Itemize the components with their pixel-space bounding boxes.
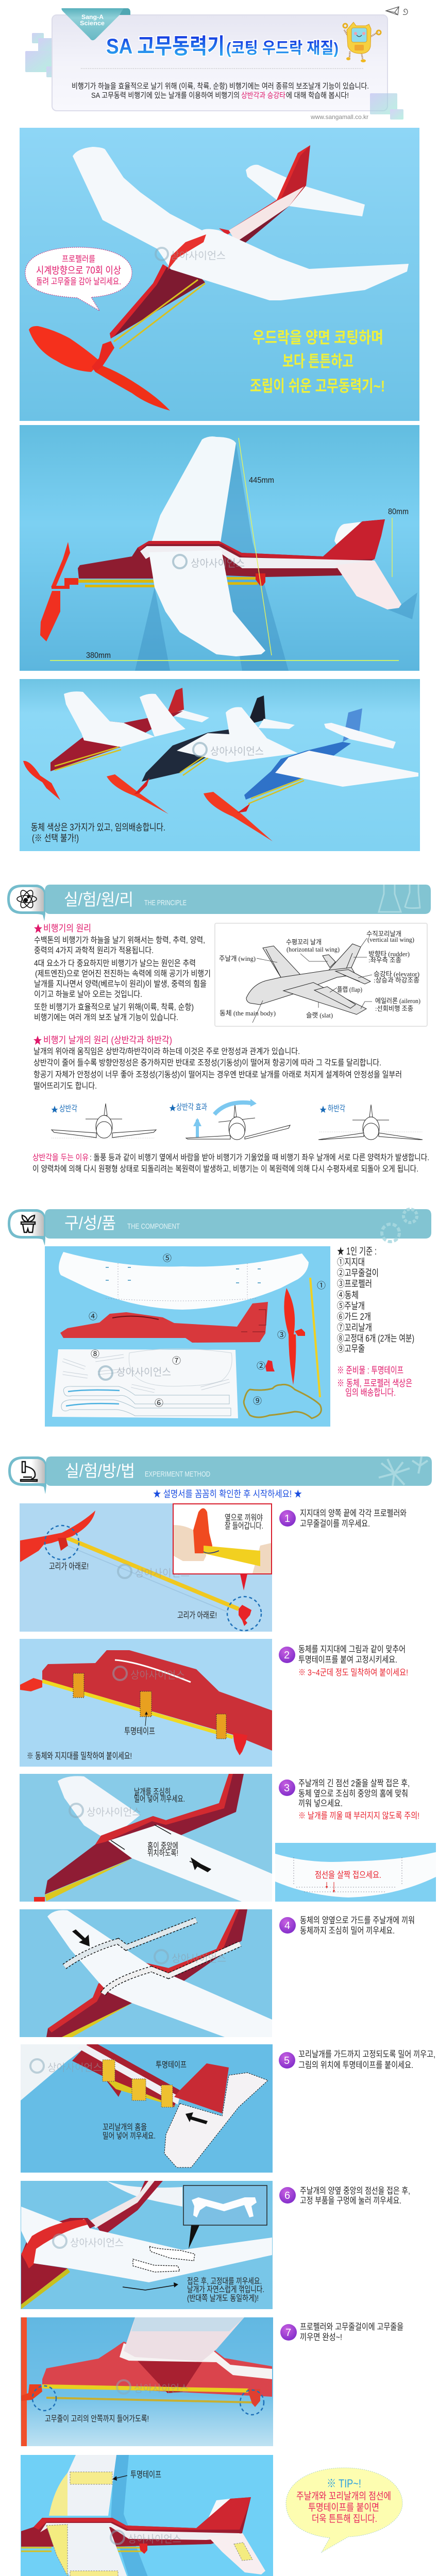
intro text: 에 대해 학습해 봅시다! <box>286 91 349 100</box>
part labels: 에일러론 (aileron) <box>375 997 420 1005</box>
watermark <box>117 2380 189 2395</box>
step badge <box>279 1917 296 1934</box>
shadows <box>135 443 417 671</box>
diagram: anhedral angle <box>318 1104 423 1140</box>
brand ribbon: Science <box>80 20 105 27</box>
heading: 비행기의 원리 <box>43 923 91 934</box>
step 5 text <box>279 2049 435 2070</box>
step 2 text <box>279 1645 408 1677</box>
horizontal tail <box>208 2533 265 2574</box>
step 1 text <box>279 1509 407 1529</box>
step badge: 5 <box>284 2055 290 2066</box>
step 2 text: 투명테이프를 붙여 고정시키세요. <box>298 1655 397 1665</box>
step badge: 3 <box>284 1783 290 1794</box>
text block: why dihedral <box>32 1153 429 1174</box>
speech bubble: 시계방향으로 70회 이상 <box>36 265 121 276</box>
watermark <box>111 2531 181 2545</box>
part number labels: ⑥ <box>155 1398 163 1408</box>
long wing <box>47 1910 272 2037</box>
label: 하반각 <box>328 1104 345 1113</box>
section header: the component <box>8 1209 431 1246</box>
body text: 날개를 지나면서 양력(베르누이 원리)이 발생, 중력의 힘을 <box>34 979 207 989</box>
tip bubble <box>286 2468 402 2552</box>
step badge <box>279 2187 296 2204</box>
wing <box>124 2317 244 2361</box>
speech bubble: 프로펠러를 <box>62 255 95 264</box>
part labels: :선회비행 조종 <box>375 1005 413 1012</box>
part number labels: ② <box>257 1361 265 1371</box>
fuselage <box>72 2044 180 2107</box>
step 4 text: 동체의 양옆으로 가드를 주날개에 끼워 <box>300 1916 415 1925</box>
step 7 text: 끼우면 완성~! <box>300 2332 342 2342</box>
photo: plane dimensions <box>20 425 419 671</box>
wing corner <box>21 2044 90 2100</box>
inset: fixing part <box>183 2185 267 2225</box>
step 2 text: 동체를 지지대에 그림과 같이 맞추어 <box>298 1645 406 1654</box>
captions: 위치하도록! <box>147 1849 178 1858</box>
captions: 날개가 자연스럽게 꺾입니다. <box>187 2285 264 2294</box>
captions: 밀어 넣어 끼우세요. <box>134 1794 185 1804</box>
intro text: 상반각과 승강타 <box>241 91 285 100</box>
body text: 또한 비행기가 효율적으로 날기 위해(이륙, 착륙, 순항) <box>34 1003 194 1012</box>
caption: tape: 투명테이프 <box>124 1726 155 1736</box>
icon: plant pot <box>21 1215 35 1232</box>
body text: 날개의 위아래 움직임은 상반각/하반각이라 하는데 이것은 주로 안정성과 관계가 있습니다. <box>33 1047 300 1056</box>
intro text: 비행기가 하늘을 효율적으로 날기 위해 (이륙, 착륙, 순항) 비행기에는 여러 종류의 보조날개 기능이 있습니다. <box>72 82 369 91</box>
watermark: 상아사이언스 <box>70 2237 124 2249</box>
colour note <box>31 822 165 843</box>
hooks <box>233 1733 247 1755</box>
hook <box>247 2389 260 2407</box>
wing <box>21 2207 272 2282</box>
parts list <box>337 1246 414 1398</box>
tip bubble: 주날개와 꼬리날개의 점선에 <box>296 2490 391 2502</box>
fuselage strip <box>95 2181 163 2236</box>
step 6 text: 고정 부품을 구멍에 눌러 끼우세요. <box>300 2196 401 2206</box>
part labels: 주날개 (wing) <box>219 955 256 962</box>
part number labels: ⑦ <box>172 1356 181 1366</box>
label: 상반각 <box>59 1104 77 1113</box>
parts list: ※ 동체, 프로펠러 색상은 <box>337 1378 412 1388</box>
title: SA 고무동력기 <box>106 34 225 58</box>
fuselage <box>46 1909 247 2037</box>
yellow slogan: 보다 튼튼하고 <box>282 352 353 370</box>
part labels: 슬랫 (slat) <box>306 1011 333 1019</box>
note: ※ 동체와 지지대를 밀착하여 붙이세요! <box>27 1751 132 1761</box>
step 4 text: 동체까지 조심히 밀어 끼우세요. <box>300 1926 395 1936</box>
plane <box>29 145 409 411</box>
parts list: ⑥가드 2개 <box>337 1312 371 1322</box>
section header: the principle <box>7 885 431 921</box>
watermark: 상아사이언스 <box>128 2533 181 2545</box>
step badge <box>279 1780 295 1796</box>
intro text <box>72 82 369 100</box>
parts list: ★ 1인 기준 : <box>337 1246 377 1257</box>
decoration: left translucent squares <box>25 33 62 77</box>
parts list: 임의 배송합니다. <box>345 1387 396 1398</box>
section header: experiment method <box>8 1456 432 1494</box>
part labels: (horizontal tail wing) <box>287 945 340 953</box>
part 2: hook <box>265 1360 275 1371</box>
icon: paper plane <box>386 7 408 15</box>
parts list: ③프로펠러 <box>337 1279 372 1289</box>
pointer <box>189 2225 199 2249</box>
speech bubble <box>25 247 132 311</box>
decoration: right translucent squares <box>370 93 403 120</box>
step badge <box>279 1510 296 1527</box>
lower wing <box>46 2524 133 2576</box>
watermark <box>173 555 245 569</box>
step 6 text <box>279 2186 410 2206</box>
step 2 photo <box>20 1639 272 1767</box>
step 4 text <box>279 1916 415 1936</box>
text block: principle of flight <box>34 923 211 1022</box>
watermark <box>53 2234 124 2249</box>
captions: (반대쪽 날개도 동일하게)! <box>187 2294 259 2303</box>
tape label <box>112 2470 161 2481</box>
step 3 inset: wing fold lines <box>275 1843 436 1902</box>
watermark <box>193 743 264 757</box>
label <box>319 1104 345 1113</box>
captions: 고리가 아래로! <box>49 1562 89 1571</box>
step 1 text: 고무줄걸이를 끼우세요. <box>300 1519 370 1529</box>
section title: 실/험/방/법 <box>65 1462 135 1480</box>
fuselage <box>42 1650 272 1751</box>
hook piece <box>239 1605 251 1626</box>
guard far <box>64 1920 196 1967</box>
step 6 text: 주날개의 양옆 중앙의 점선을 접은 후, <box>300 2186 410 2196</box>
captions: 접은 후, 고정대를 끼우세요. <box>187 2277 262 2286</box>
part labels: 수평꼬리 날개 <box>286 938 322 946</box>
tape strips <box>73 1673 226 1739</box>
dashed slots <box>133 2246 195 2272</box>
fuselage <box>42 2342 272 2397</box>
part labels: :좌우측 조종 <box>368 956 401 964</box>
body text: (제트엔진)으로 얻어진 전진하는 속력에 의해 공기가 비행기 <box>35 969 211 978</box>
intro text: SA 고무동력 비행기에 있는 날개를 이용하여 비행기의 <box>91 91 240 100</box>
inset: side-fit detail: 옆으로 끼워야 <box>225 1513 263 1522</box>
captions: 투명테이프 <box>156 2060 187 2070</box>
watermark: 상아사이언스 <box>87 1806 141 1818</box>
caption: 고무줄이 고리의 안쪽까지 들어가도록! <box>45 2414 149 2424</box>
tip bubble: ※ TIP~! <box>327 2477 361 2490</box>
section subtitle: THE COMPONENT <box>127 1222 180 1231</box>
part number labels <box>89 1253 326 1408</box>
parts list: ⑧고정대 6개 (2개는 여분) <box>337 1333 414 1344</box>
watermark: 상아사이언스 <box>130 1669 185 1681</box>
watermark: 상아사이언스 <box>47 2062 102 2074</box>
arrow <box>186 2112 208 2124</box>
white guard <box>120 2343 272 2379</box>
leader lines <box>252 938 372 1023</box>
parts list: ⑦꼬리날개 <box>337 1323 372 1333</box>
yellow slogan <box>250 329 385 395</box>
step 1 text: 지지대의 양쪽 끝에 각각 프로펠러와 <box>300 1509 407 1518</box>
tail <box>107 2181 182 2207</box>
body text: 이기고 하늘로 날아 오르는 것입니다. <box>34 990 142 999</box>
section title: 구/성/품 <box>64 1214 116 1232</box>
website url: www.sangamall.co.kr <box>310 113 368 121</box>
part number labels: ③ <box>277 1330 286 1340</box>
dimension labels: 445mm <box>249 476 274 485</box>
lower red prop <box>36 773 60 800</box>
propeller <box>21 2317 27 2446</box>
step 2 text: ※ 3~4군데 정도 밀착하여 붙이세요! <box>298 1668 408 1677</box>
label <box>52 1104 77 1113</box>
shadows <box>111 2455 155 2576</box>
step 1 photo <box>20 1503 272 1632</box>
caption: tape <box>124 1711 155 1736</box>
body text: 중력의 4가지 과학적 원리가 적용됩니다. <box>34 946 154 955</box>
captions: 밀어 넣어 끼우세요. <box>103 2131 156 2141</box>
part number labels: ① <box>317 1281 326 1291</box>
step badge <box>279 2052 295 2069</box>
parts list: ①지지대 <box>337 1257 365 1267</box>
part 3: propeller <box>284 1288 305 1385</box>
tip bubble: 투명테이프를 붙이면 <box>308 2502 379 2513</box>
watermark: 상아사이언스 <box>172 1953 226 1964</box>
diagram: parts of an aeroplane <box>215 923 427 1026</box>
inset: side-fit detail <box>173 1504 272 1574</box>
step 3 inset: wing fold lines: 점선을 살짝 접으세요. <box>315 1870 381 1880</box>
colour note: 동체 색상은 3가지가 있고, 임의배송합니다. <box>31 822 165 833</box>
step 5 text: 그림의 위치에 투명테이프를 붙이세요. <box>298 2060 413 2070</box>
watermark <box>113 1667 185 1681</box>
watermark <box>30 2059 102 2074</box>
brand ribbon <box>61 8 130 40</box>
part 9: rubber band <box>244 1384 321 1418</box>
part labels: 승강타 (elevator) <box>374 970 419 978</box>
parts list: ※ 준비물 : 투명테이프 <box>337 1365 403 1376</box>
fuselage <box>45 1774 244 1894</box>
step 3 text: 주날개의 긴 점선 2줄을 살짝 접은 후, <box>298 1778 410 1788</box>
step badge: 1 <box>284 1513 290 1524</box>
step badge: 2 <box>284 1650 290 1661</box>
body text <box>34 936 211 1022</box>
title <box>106 34 339 58</box>
part number labels: ⑧ <box>91 1349 99 1359</box>
instruction reminder: ★ 설명서를 꼼꼼히 확인한 후 시작하세요! ★ <box>153 1489 302 1499</box>
label: 상반각 효과 <box>176 1103 207 1112</box>
part labels: :상승과 하강조종 <box>374 976 419 984</box>
pointer <box>240 1574 247 1590</box>
body text: 4대 요소가 다 중요하지만 비행기가 날으는 원인은 추력 <box>34 959 196 968</box>
watermark: 상아사이언스 <box>170 250 226 262</box>
tape strips <box>103 2060 173 2107</box>
step 3 photo <box>20 1774 272 1902</box>
part labels: 수직꼬리날개 <box>366 930 401 938</box>
title: (코팅 우드락 재질) <box>226 39 339 57</box>
captions <box>49 1562 217 1620</box>
tip bubble: 더욱 튼튼해 집니다. <box>312 2513 377 2524</box>
part labels <box>219 930 420 1019</box>
near wing <box>108 1825 272 1902</box>
yellow slogan: 우드락을 양면 코팅하며 <box>252 329 383 347</box>
panel background <box>52 15 388 111</box>
watermark: 상아사이언스 <box>191 557 245 569</box>
part number labels: ⑨ <box>253 1396 262 1406</box>
dimension labels: 380mm <box>86 651 111 660</box>
photo: red plane from behind with speech bubble <box>20 128 419 421</box>
watermark: 상아사이언스 <box>116 1366 171 1378</box>
body text: 수백톤의 비행기가 하늘을 날기 위해서는 항력, 추력, 양력, <box>34 936 205 945</box>
finished plane photo with tape tip <box>21 2455 273 2576</box>
yellow slogan: 조립이 쉬운 고무동력기~! <box>250 377 385 395</box>
part labels: 동체 (the main body) <box>220 1009 276 1017</box>
part labels: 플랩 (flap) <box>337 986 362 993</box>
brand ribbon: Sang-A <box>81 13 104 21</box>
upper tail <box>208 2499 230 2524</box>
black plane <box>107 696 298 814</box>
plane drawing <box>246 944 370 1014</box>
captions: 날개를 조심히 <box>134 1787 171 1797</box>
photo: component parts <box>45 1246 330 1427</box>
parts list: ⑨고무줄 <box>337 1344 365 1354</box>
rubber <box>42 2386 248 2391</box>
section subtitle: THE PRINCIPLE <box>144 899 187 907</box>
body text: 떨어뜨리기도 합니다. <box>33 1081 97 1091</box>
watermark: 상아사이언스 <box>134 2383 189 2395</box>
stick <box>42 1681 233 1737</box>
colour note: (※ 선택 불가!) <box>32 833 79 843</box>
step badge <box>280 2324 297 2341</box>
step badge <box>279 1647 295 1663</box>
dimension labels: 80mm <box>388 507 409 516</box>
step 3 text: 끼워 넣으세요. <box>298 1799 343 1808</box>
step 7 photo <box>21 2317 273 2446</box>
red plane <box>23 688 209 800</box>
dimension labels <box>86 476 409 660</box>
stick <box>62 2003 132 2037</box>
propeller <box>20 1511 95 1562</box>
part labels: 방향타 (rudder) <box>368 950 410 958</box>
stick <box>45 1859 132 1901</box>
step badge: 4 <box>284 1920 290 1931</box>
dimension lines <box>50 438 399 660</box>
step 3 text <box>279 1778 419 1821</box>
fin <box>174 2063 229 2113</box>
rubber <box>21 2548 142 2551</box>
text block: dihedral principle <box>33 1035 402 1091</box>
dashed circles <box>32 2386 56 2411</box>
decoration: bursts <box>379 1456 428 1486</box>
watermark <box>155 1950 226 1964</box>
captions: 고리가 아래로! <box>177 1611 217 1620</box>
wing arrows <box>111 1825 211 1869</box>
far wing <box>58 1776 140 1841</box>
captions <box>187 2277 264 2303</box>
dotted divider <box>81 68 364 69</box>
part number labels: ⑤ <box>163 1253 172 1263</box>
part 4: fuselage <box>60 1302 268 1343</box>
decoration: gears <box>382 1209 417 1242</box>
body <box>21 2218 95 2304</box>
heading: 비행기 날개의 원리 (상반각과 하반각) <box>43 1035 172 1045</box>
fuselage <box>21 2497 251 2547</box>
part 5: main wing <box>59 1252 309 1310</box>
step 5 photo <box>21 2044 273 2173</box>
arrow <box>123 2282 178 2290</box>
part 1: stick <box>310 1278 320 1397</box>
icon: atom <box>17 889 37 909</box>
white middle wing <box>140 694 186 737</box>
step 4 photo <box>20 1909 272 2037</box>
arrow <box>72 1929 90 1946</box>
captions: 꼬리날개의 홈을 <box>103 2123 147 2132</box>
captions <box>134 1787 185 1858</box>
tape label: 투명테이프 <box>130 2470 161 2480</box>
upper wing <box>49 2455 116 2516</box>
diagram: dihedral effect <box>169 1099 290 1140</box>
watermark: 상아사이언스 <box>135 1567 190 1579</box>
watermark <box>70 1804 141 1818</box>
watermark <box>118 1565 190 1579</box>
body text <box>33 1047 402 1091</box>
text block: why dihedral: 상반각을 두는 이유 <box>32 1153 89 1162</box>
step 3 text: 동체 옆으로 조심히 중앙의 홈에 맞춰 <box>298 1789 408 1799</box>
parts 6,7,8: foam sheet <box>52 1349 238 1418</box>
step 7 text <box>280 2322 403 2342</box>
blue plane <box>204 708 418 841</box>
body text: 상반각이 줄어 들수록 방향안정성은 증가하지만 반대로 조정성(기동성)이 떨어져 항공기에 따라 그 각도를 달리합니다. <box>33 1058 381 1067</box>
icon: microscope <box>21 1462 37 1481</box>
tail <box>164 2073 268 2167</box>
parts list: ⑤주날개 <box>337 1301 365 1311</box>
diagram: dihedral angle <box>52 1104 156 1138</box>
captions <box>103 2060 187 2141</box>
slot <box>115 1660 191 1682</box>
body text: 비행기에는 여러 개의 보조 날개 기능이 있습니다. <box>34 1013 178 1022</box>
step badge: 7 <box>285 2327 291 2338</box>
part number labels: ④ <box>89 1312 97 1321</box>
header panel: product title and intro <box>25 7 408 121</box>
inset: side-fit detail: 잘 들어갑니다. <box>225 1521 263 1531</box>
icon: robot mascot <box>343 22 381 62</box>
step badge: 6 <box>284 2190 290 2201</box>
step 6 photo <box>21 2181 273 2309</box>
stick <box>64 1537 239 1609</box>
parts list: ②고무줄걸이 <box>337 1268 379 1278</box>
section subtitle: EXPERIMENT METHOD <box>145 1470 210 1479</box>
watermark: 상아사이언스 <box>210 745 264 757</box>
decoration: flasks <box>379 885 420 912</box>
photo: three body colours <box>20 679 420 851</box>
watermark <box>99 1366 171 1380</box>
dashed circles <box>45 1526 79 1560</box>
parts list: ④동체 <box>337 1290 359 1300</box>
part labels: (vertical tail wing) <box>367 936 414 943</box>
watermark <box>156 248 226 262</box>
captions: 홈이 중앙에 <box>147 1841 178 1851</box>
step 7 text: 프로펠러와 고무줄걸이에 고무줄을 <box>300 2322 403 2332</box>
label <box>169 1103 207 1112</box>
speech bubble: 돌려 고무줄을 감아 날리세요. <box>36 277 121 286</box>
plane <box>40 436 401 656</box>
section title: 실/험/원/리 <box>64 890 133 909</box>
guard near <box>103 1944 240 1994</box>
